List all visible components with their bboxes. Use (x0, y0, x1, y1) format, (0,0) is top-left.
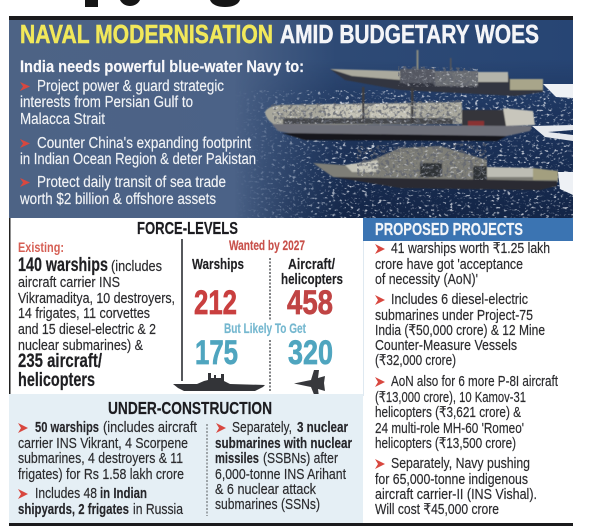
text block: submarines and mine counter-measure vessels: (₹32,000 crore) (375, 352, 456, 369)
text block: warships under construction: shipyards, 2 frigates (18, 501, 129, 518)
heading (20, 19, 539, 49)
text block: indigenous aircraft carrier (375, 455, 537, 518)
icon: bottom warship (313, 146, 558, 190)
number: 175 warships likely: 175 (195, 334, 238, 372)
text block: 41 warships approved: 41 warships worth ₹1.25 lakh (391, 240, 550, 257)
text block: aircraft and helicopters: (₹13,000 crore), 10 Kamov-31 (375, 389, 526, 406)
text block: submarines and mine counter-measure vessels: Counter-Measure Vessels (375, 337, 517, 354)
text block: existing fleet: 14 frigates, 11 corvettes (18, 305, 150, 322)
label: warships column: Warships (192, 256, 244, 273)
text block: 41 warships approved: of necessity (AoN)' (375, 271, 478, 288)
text block: why India needs a blue-water navy: interests from Persian Gulf to (20, 94, 193, 111)
panel: under-construction (9, 394, 363, 524)
text block: nuclear submarines: Separately, (232, 419, 292, 436)
text block: warships under construction: frigates) for Rs 1.58 lakh crore (18, 466, 184, 483)
label: aircraft and helicopters column: Aircraft/ (288, 256, 336, 273)
text block: warships under construction: carrier INS Vikrant, 4 Scorpene (18, 435, 188, 452)
text block: why India needs a blue-water navy: worth $2 billion & offshore assets (19, 191, 216, 208)
text block: nuclear submarines: 6,000-tonne INS Arihant (215, 466, 347, 483)
text block: why India needs a blue-water navy: Malacca Strait (20, 111, 106, 128)
text block: indigenous aircraft carrier: aircraft carrier-II (INS Vishal). (375, 486, 537, 503)
text block: aircraft and helicopters: 24 multi-role MH-60 'Romeo' (375, 420, 524, 437)
icon: wake of top warship (543, 84, 573, 98)
panel: proposed projects (363, 218, 573, 518)
text block: submarines and mine counter-measure vessels: submarines under Project-75 (375, 307, 533, 324)
icon: aircraft carrier silhouette (173, 373, 265, 391)
text block: nuclear submarines (215, 419, 352, 513)
text block: why India needs a blue-water navy: Protect daily transit of sea trade (37, 174, 226, 191)
text block: aircraft and helicopters: AoN also for 6 more P-8I aircraft (391, 373, 559, 390)
text block: existing fleet: Vikramaditya, 10 destroyers, (18, 290, 175, 307)
label: but likely to get: But Likely To Get (224, 321, 306, 336)
cropped headline fragments above the panel (85, 0, 240, 7)
heading: AMID BUDGETARY WOES (280, 19, 539, 49)
text block: indigenous aircraft carrier: for 65,000-tonne indigenous (375, 471, 528, 488)
panel: force-levels (9, 218, 363, 397)
text block: warships under construction: submarines, 4 destroyers & 11 (18, 450, 183, 467)
heading: force-levels: FORCE-LEVELS (137, 218, 238, 238)
number: 212 warships wanted: 212 (194, 284, 237, 322)
heading: NAVAL MODERNISATION (20, 19, 273, 49)
text block: existing fleet (18, 239, 175, 391)
text block: existing fleet: aircraft carrier INS (18, 274, 120, 291)
text block: nuclear submarines: 3 nuclear (297, 419, 348, 436)
text block: aircraft and helicopters: helicopters (₹3,621 crore) & (375, 404, 521, 421)
text block: aircraft and helicopters (375, 373, 559, 452)
text block: why India needs a blue-water navy: India needs powerful blue-water Navy to: (20, 58, 304, 76)
label: aircraft and helicopters column: helicopters (281, 271, 343, 288)
text block: 41 warships approved (375, 240, 550, 288)
text block: submarines and mine counter-measure vessels: India (₹50,000 crore) & 12 Mine (375, 322, 545, 339)
text block: indigenous aircraft carrier: Will cost ₹45,000 crore (375, 501, 499, 518)
heading: proposed projects: PROPOSED PROJECTS (375, 219, 523, 239)
text block: nuclear submarines: & 6 nuclear attack (215, 481, 316, 498)
text block: existing fleet: and 15 diesel-electric & 2 (18, 321, 156, 338)
label: aircraft and helicopters column (281, 256, 343, 288)
text block: why India needs a blue-water navy: in Indian Ocean Region & deter Pakistan (20, 151, 256, 168)
superstructure texture on warships (270, 66, 487, 180)
text block: existing fleet: 140 warships (18, 255, 108, 276)
text block: 41 warships approved: crore have got 'acceptance (375, 256, 523, 273)
text block: why India needs a blue-water navy (19, 58, 304, 208)
icon: middle warship (265, 87, 535, 141)
icon: wake of bottom warship (558, 172, 573, 195)
text block: nuclear submarines: (SSBNs) after (263, 450, 338, 467)
text block: aircraft and helicopters: helicopters (₹13,500 crore) (375, 435, 516, 452)
text block: existing fleet: helicopters (18, 370, 95, 391)
text block: warships under construction: Includes 48 (35, 485, 97, 502)
text block: indigenous aircraft carrier: Separately, Navy pushing (391, 455, 530, 472)
text block: existing fleet: 235 aircraft/ (18, 351, 103, 372)
text block: nuclear submarines: missiles (215, 450, 259, 467)
text block: submarines and mine counter-measure vessels: Includes 6 diesel-electric (391, 291, 528, 308)
label: wanted by 2027: Wanted by 2027 (229, 238, 305, 253)
text block: warships under construction: in Indian (100, 485, 147, 502)
number: 320 aircraft likely: 320 (288, 334, 333, 372)
icon: top warship (330, 50, 543, 96)
text block: existing fleet: nuclear submarines) & (18, 337, 143, 354)
text block: nuclear submarines: submarines with nuclear (215, 435, 352, 452)
text block: nuclear submarines: submarines (SSNs) (215, 496, 320, 513)
text block: warships under construction: 50 warships (35, 419, 99, 436)
text block: warships under construction: in Russia (133, 501, 184, 518)
icon: fighter jet silhouette (294, 370, 325, 397)
text block: why India needs a blue-water navy: Project power & guard strategic (37, 78, 224, 95)
text block: why India needs a blue-water navy: Counter China's expanding footprint (37, 135, 252, 152)
text block: existing fleet: (includes (111, 258, 162, 275)
text block: warships under construction (18, 419, 198, 518)
text block: existing fleet: Existing: (18, 239, 64, 255)
text block: submarines and mine counter-measure vessels (375, 291, 545, 369)
heading: under-construction: UNDER-CONSTRUCTION (108, 398, 272, 418)
text block: warships under construction: (includes aircraft (103, 419, 198, 436)
panel: photo of warships with sea background (9, 16, 573, 218)
icon: wake of middle warship (532, 125, 573, 141)
number: 458 aircraft wanted: 458 (287, 284, 333, 322)
